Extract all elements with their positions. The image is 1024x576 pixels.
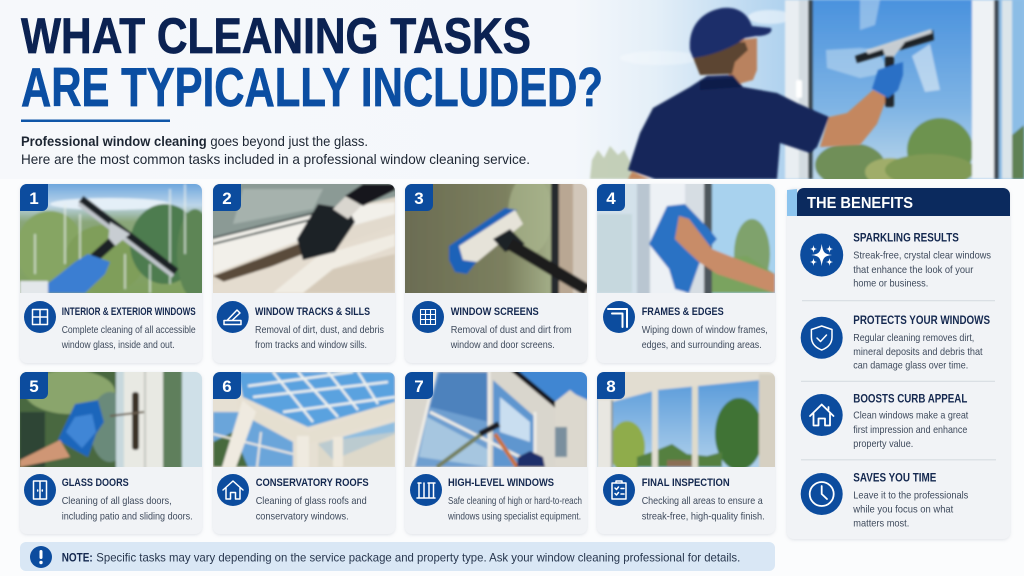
card title: CONSERVATORY ROOFS [256, 477, 369, 489]
benefit: sparkling results [800, 233, 991, 290]
icon: frame corner [603, 301, 635, 333]
icon: checklist [603, 474, 635, 506]
card description: from tracks and window sills. [255, 340, 367, 351]
panel: card 5 glass doors [15, 367, 207, 534]
card description [642, 325, 768, 351]
benefit: protects your windows [801, 315, 990, 372]
card description [255, 325, 384, 351]
card description: edges, and surrounding areas. [642, 340, 762, 351]
photo: gloved hand on glass door [20, 372, 202, 467]
card description: Checking all areas to ensure a [642, 496, 763, 507]
benefit description [853, 411, 968, 450]
photo: conservatory glass roof [213, 372, 395, 467]
photo: high-level window with pole [405, 372, 587, 467]
icon: clock [801, 473, 843, 515]
photo: clean windows and trees [597, 372, 775, 467]
header ribbon: THE BENEFITS [807, 195, 913, 212]
card description: Wiping down of window frames, [642, 325, 768, 336]
number badge 8 [597, 372, 625, 399]
panel: card 3 window screens [400, 174, 592, 363]
number badge 6 [213, 372, 241, 399]
panel: card 6 conservatory roofs [208, 367, 400, 534]
number badge 1: 1 [29, 189, 39, 208]
card description: streak-free, high-quality finish. [642, 512, 765, 522]
benefit description: can damage glass over time. [853, 361, 968, 372]
card description: Cleaning of glass roofs and [256, 496, 367, 507]
number badge 5 [20, 372, 48, 399]
photo: brush in track [213, 184, 395, 293]
photo: squeegee on glass [20, 184, 202, 293]
benefit description: first impression and enhance [853, 425, 968, 436]
card description: Removal of dirt, dust, and debris [255, 325, 384, 336]
header ribbon [787, 188, 1010, 216]
icon: house [801, 394, 843, 436]
intro text: Professional window cleaning goes beyond just the glass. [21, 134, 368, 149]
benefit title: SPARKLING RESULTS [853, 233, 959, 245]
panel: card 1 interior and exterior windows [15, 179, 213, 363]
card title: HIGH-LEVEL WINDOWS [448, 477, 554, 489]
card description [256, 496, 367, 522]
icon: shield [801, 317, 843, 359]
card description: Cleaning of all glass doors, [62, 496, 172, 507]
icon: tall windows [410, 474, 442, 506]
benefit description [853, 333, 983, 372]
benefit title: PROTECTS YOUR WINDOWS [853, 315, 990, 327]
benefit description: matters most. [853, 519, 909, 530]
number badge 5: 5 [29, 377, 39, 396]
number badge 1 [20, 184, 48, 211]
card title: FRAMES & EDGES [642, 306, 724, 318]
benefit description [852, 490, 968, 530]
intro text: Here are the most common tasks included in a professional window cleaning service. [21, 152, 530, 167]
number badge 3 [405, 184, 433, 211]
title: ARE TYPICALLY INCLUDED? [21, 56, 603, 118]
card description [450, 325, 572, 351]
card description: conservatory windows. [256, 512, 349, 522]
number badge 7: 7 [414, 377, 424, 396]
card description: including patio and sliding doors. [62, 512, 193, 522]
icon: glass door [24, 474, 56, 506]
benefit description: Clean windows make a great [853, 411, 968, 422]
panel: the benefits [787, 188, 1010, 539]
card description: Complete cleaning of all accessible [62, 325, 196, 336]
panel: card 7 high-level windows [400, 367, 592, 534]
benefit description: while you focus on what [852, 505, 953, 516]
title underline [21, 120, 170, 122]
title [21, 8, 603, 118]
benefit description: that enhance the look of your [853, 265, 974, 276]
icon: window [24, 301, 56, 333]
icon: screen grid [412, 301, 444, 333]
intro text [21, 134, 530, 167]
number badge 2 [213, 184, 241, 211]
card description [447, 496, 582, 522]
photo: cloth on frame [597, 184, 775, 293]
panel: card 2 window tracks and sills [208, 179, 400, 363]
card title: WINDOW TRACKS & SILLS [255, 306, 370, 318]
benefit description: property value. [853, 439, 913, 450]
card title: WINDOW SCREENS [451, 306, 539, 318]
card description: Removal of dust and dirt from [451, 325, 572, 336]
note text: NOTE: [62, 550, 93, 564]
card description [62, 496, 193, 522]
icon: house [217, 474, 249, 506]
title: WHAT CLEANING TASKS [21, 8, 531, 64]
card description: window glass, inside and out. [61, 340, 175, 351]
benefit description [853, 251, 991, 290]
panel: card 8 final inspection [592, 367, 784, 534]
card description: Safe cleaning of high or hard-to-reach [448, 496, 582, 507]
benefit title: BOOSTS CURB APPEAL [853, 394, 967, 406]
benefit description: Leave it to the professionals [853, 490, 968, 501]
note text: Specific tasks may vary depending on the service package and property type. Ask your window cleaning professional for details. [96, 550, 740, 564]
icon: exclamation [30, 546, 52, 568]
card description [642, 496, 765, 522]
hero scene: window [785, 0, 1024, 187]
number badge 6: 6 [222, 377, 232, 396]
hero scene: trees and clouds [590, 10, 792, 179]
icon: sparkles [800, 234, 843, 276]
benefit: boosts curb appeal [801, 394, 968, 450]
card description [61, 325, 196, 351]
card title: FINAL INSPECTION [642, 477, 730, 489]
benefit description: mineral deposits and debris that [853, 347, 983, 358]
number badge 4 [597, 184, 625, 211]
card title: GLASS DOORS [62, 477, 129, 489]
number badge 3: 3 [414, 189, 424, 208]
number badge 7 [405, 372, 433, 399]
number badge 8: 8 [606, 377, 616, 396]
benefit description: Regular cleaning removes dirt, [853, 333, 974, 344]
benefit title: SAVES YOU TIME [853, 473, 937, 485]
card description: window and door screens. [450, 340, 555, 351]
note bar [20, 542, 775, 571]
card title: INTERIOR & EXTERIOR WINDOWS [62, 306, 196, 318]
worker with squeegee [628, 8, 934, 179]
number badge 2: 2 [222, 189, 232, 208]
icon: window track [217, 301, 249, 333]
panel: card 4 frames and edges [592, 179, 784, 363]
benefit: saves you time [801, 473, 968, 530]
benefit description: Streak-free, crystal clear windows [853, 251, 991, 262]
hero banner [579, 0, 1024, 179]
benefit description: home or business. [853, 279, 928, 290]
card description: windows using specialist equipment. [447, 512, 581, 522]
photo: brush on mesh screen [405, 184, 587, 293]
number badge 4: 4 [606, 189, 616, 208]
